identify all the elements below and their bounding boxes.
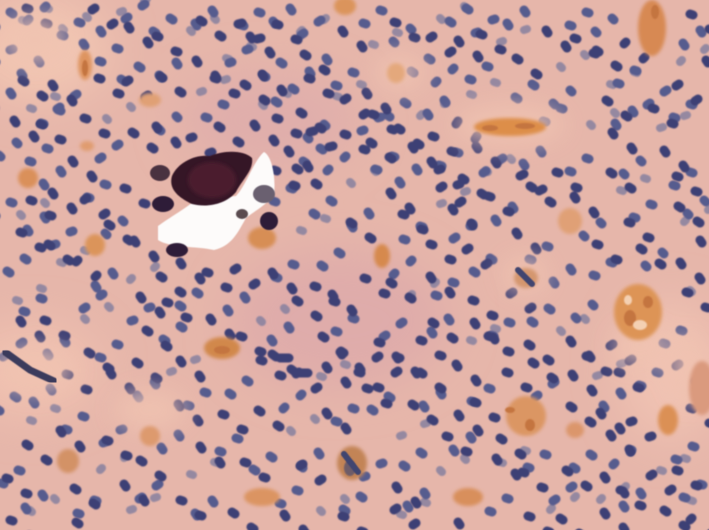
pale halos: nuclei-sparse stroma around vessels xyxy=(0,16,709,430)
nucleus: spindle cells in vessels xyxy=(344,270,532,472)
calcified focus: white cleft and dark deposit xyxy=(150,152,278,257)
deposit core xyxy=(188,162,236,198)
nucleus: dark spindle cell at left edge xyxy=(5,352,54,381)
dark satellite deposits xyxy=(150,165,278,257)
vessel highlights: pale lumen xyxy=(624,295,647,330)
vessel detail: red-orange speckle xyxy=(82,5,659,476)
white cleft xyxy=(158,152,275,250)
dark central deposit xyxy=(171,152,252,206)
